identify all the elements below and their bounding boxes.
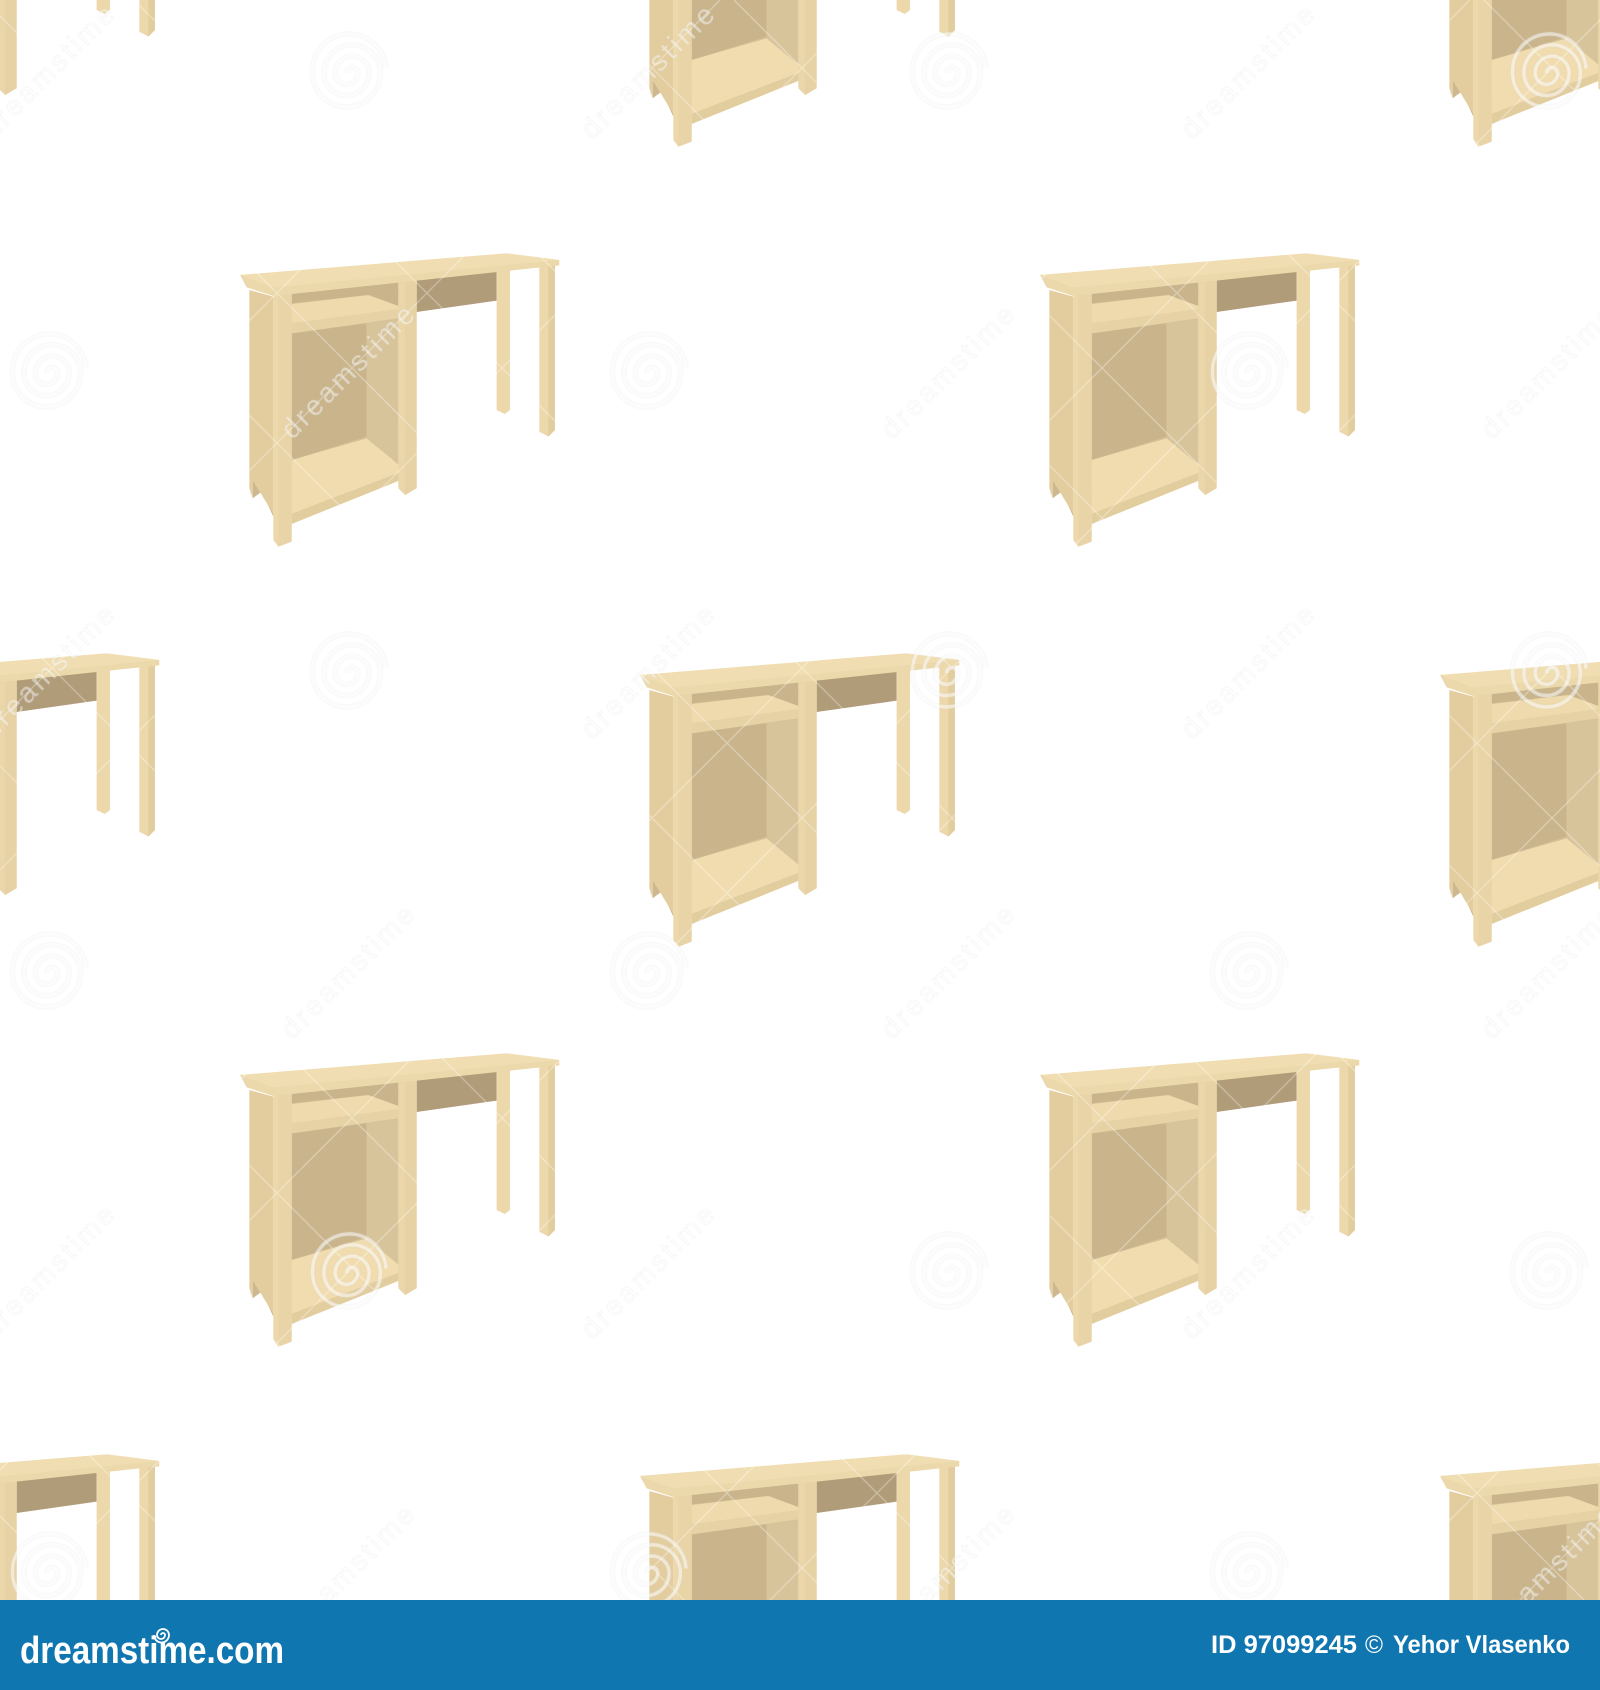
image id and author — [1211, 1631, 1570, 1659]
icon: desk top right — [1440, 0, 1600, 147]
image id and author: © — [1365, 1631, 1384, 1659]
icon: brand spiral — [154, 1629, 169, 1643]
brand name: dreamstime.com — [20, 1630, 284, 1672]
image id and author: Yehor Vlasenko — [1393, 1631, 1570, 1659]
icon: desk middle left — [0, 653, 159, 947]
icon: desk bottom center — [640, 1454, 959, 1690]
icon: desk top center — [640, 0, 959, 147]
icon: desk lower right — [1040, 1053, 1359, 1347]
icon: desk middle center — [640, 653, 959, 947]
icon: desk bottom right — [1440, 1454, 1600, 1690]
icon: desk top left — [0, 0, 159, 147]
icon: desk upper right — [1040, 253, 1359, 547]
image id and author: ID 97099245 — [1211, 1631, 1357, 1659]
icon: desk middle right — [1440, 653, 1600, 947]
icon: desk lower left — [240, 1053, 559, 1347]
footer banner — [0, 1600, 1600, 1690]
icon: desk bottom left — [0, 1454, 159, 1690]
icon: desk upper left — [240, 253, 559, 547]
